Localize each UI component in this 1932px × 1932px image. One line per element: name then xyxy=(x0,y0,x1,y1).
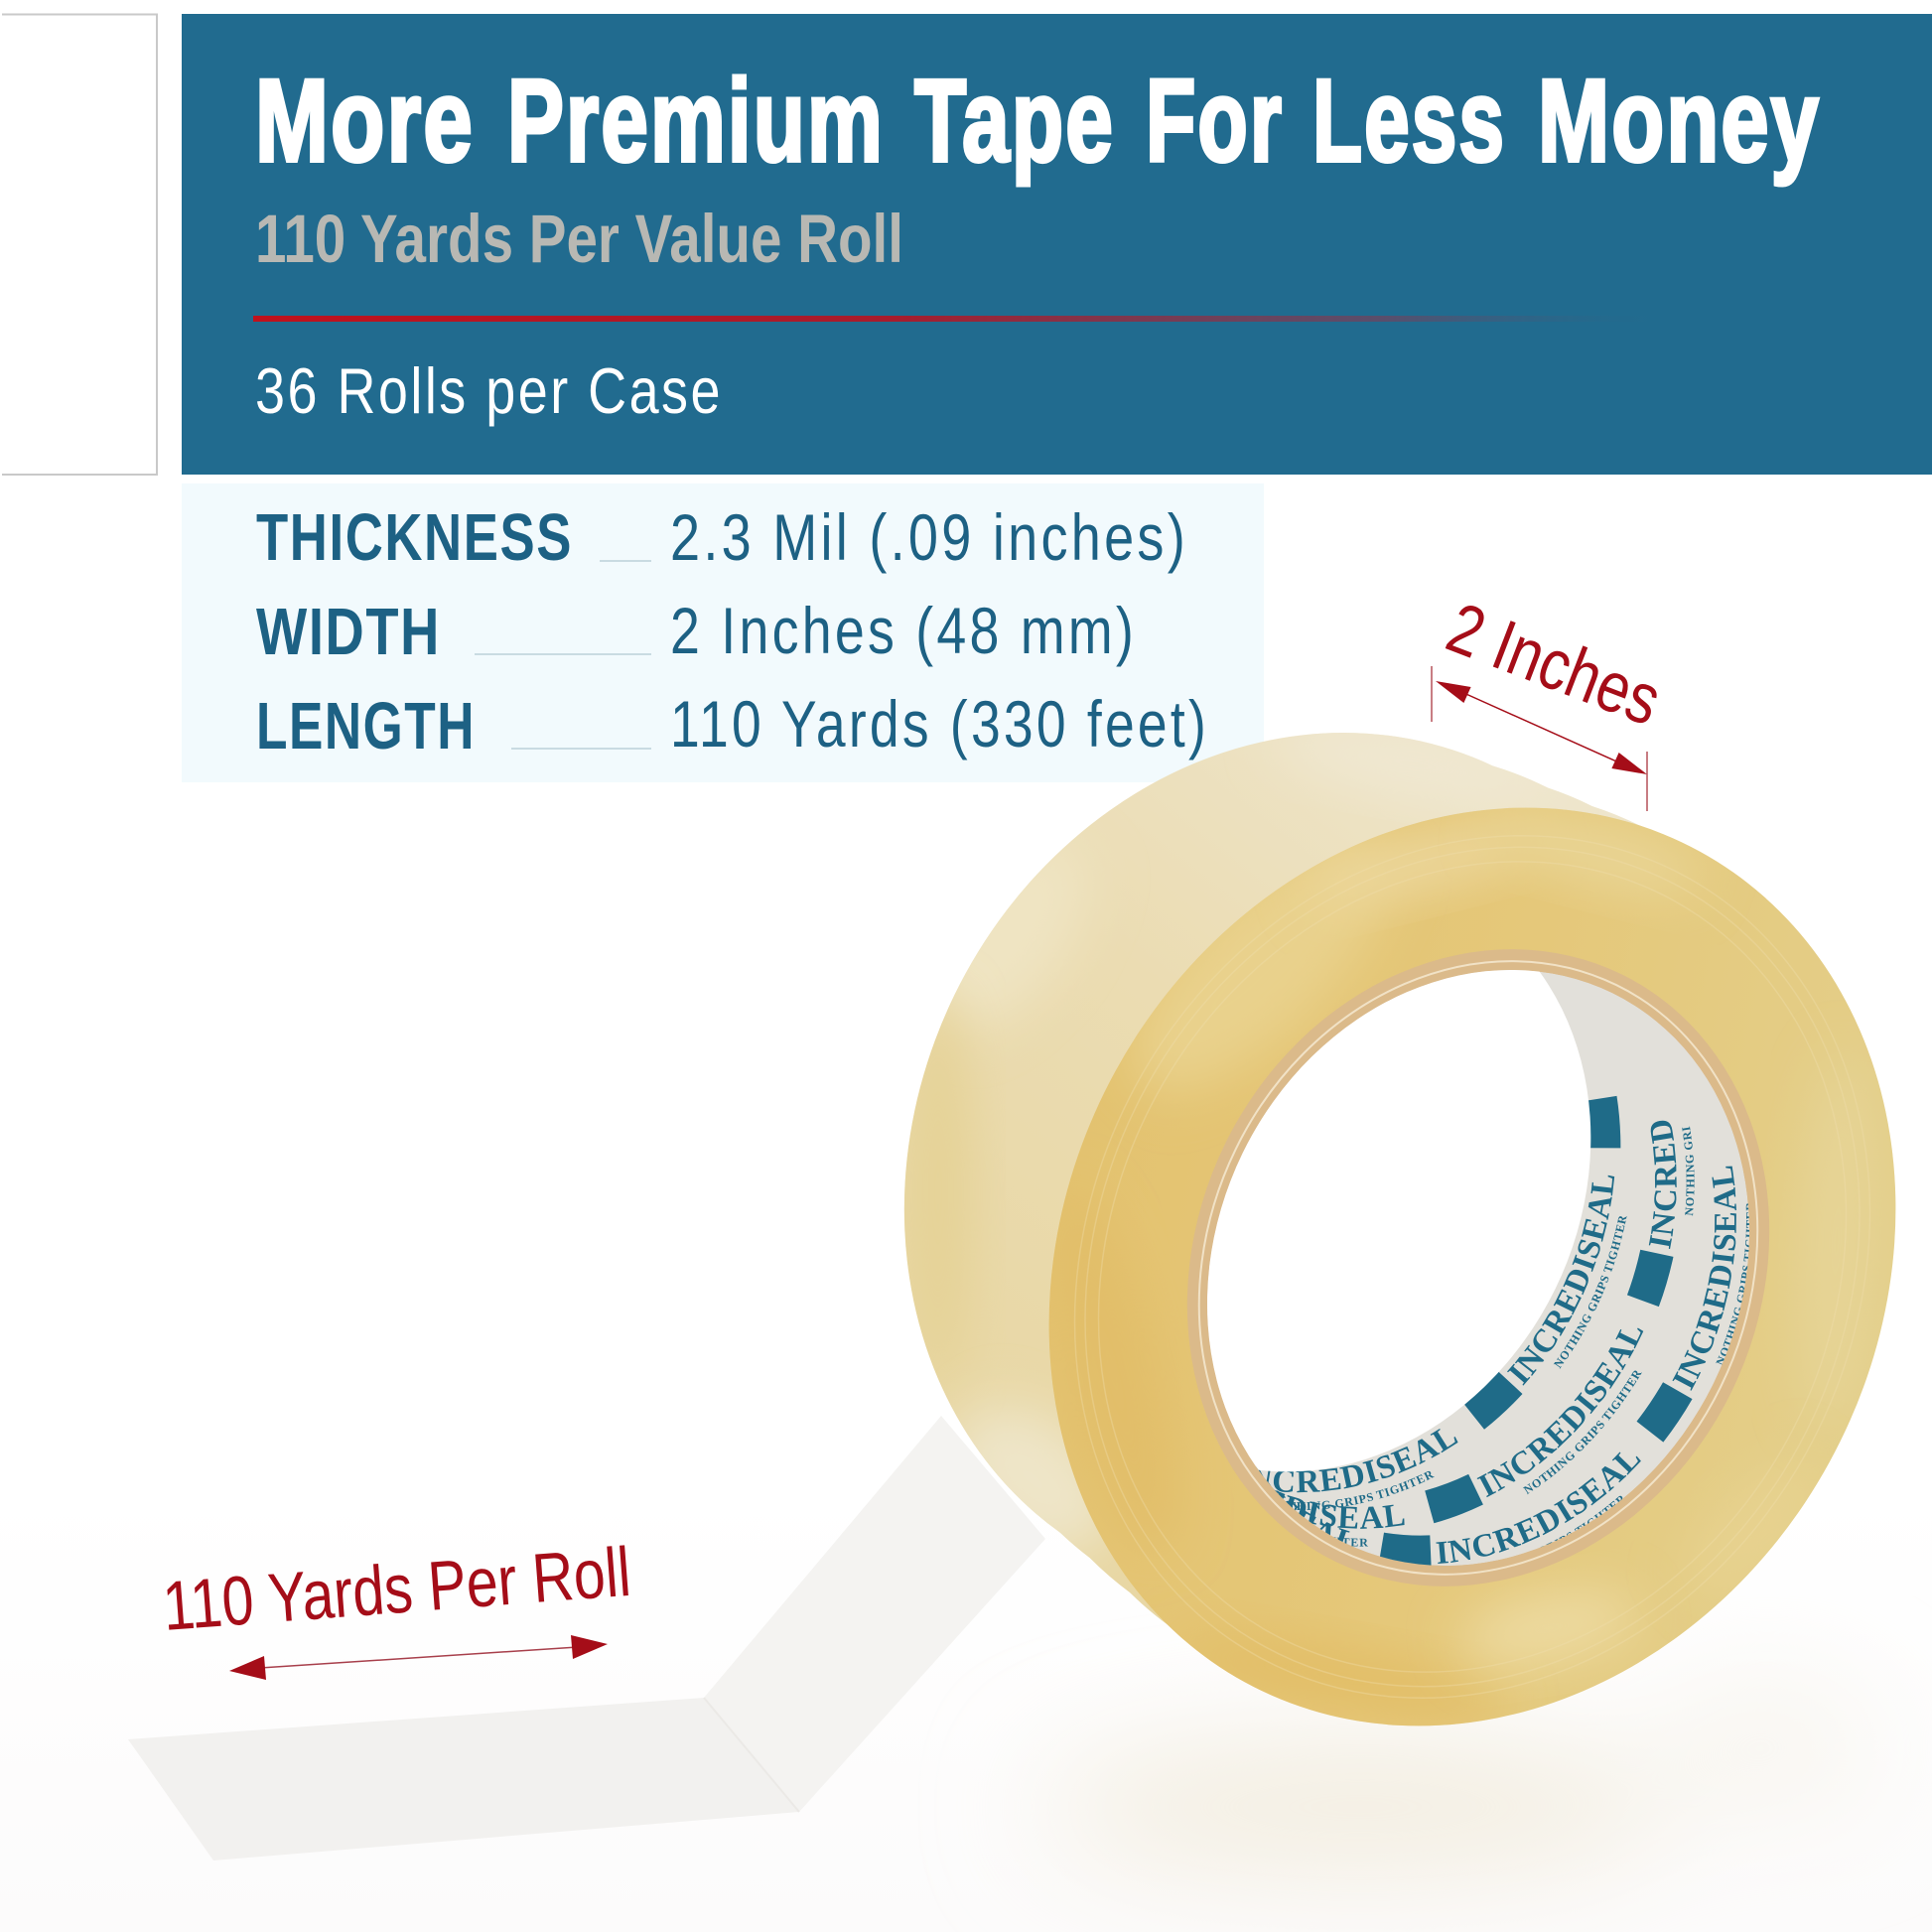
thickness row xyxy=(256,500,1188,575)
tape roll xyxy=(903,733,1896,1725)
floor background xyxy=(0,1489,1932,1932)
brand text bands: INCREDISEAL xyxy=(1436,1451,1641,1564)
floor shadow under roll xyxy=(1042,1688,1876,1871)
brand text bands: NOTHING GRIPS TIGHTER xyxy=(1716,1203,1749,1364)
thickness row: THICKNESS xyxy=(256,500,573,575)
printed core interior xyxy=(1207,970,1749,1566)
subtitle: 110 Yards Per Value Roll xyxy=(255,201,903,277)
width arrow xyxy=(1432,666,1647,811)
tape strip on table xyxy=(128,1416,1045,1861)
kraft core ring xyxy=(1082,851,1874,1685)
red divider xyxy=(253,316,1668,322)
title: Premium xyxy=(507,56,885,187)
brand text bands: NOTHING GRIPS TIGHTER xyxy=(1523,1370,1642,1495)
cardboard core and hole xyxy=(1187,949,1769,1587)
brand text bands: INCREDISEAL xyxy=(1507,1175,1614,1386)
rolls per case: 36 Rolls per Case xyxy=(255,354,723,427)
band patches xyxy=(1380,1096,1692,1566)
title: More xyxy=(255,56,475,187)
brand text bands: INCREDISEAL xyxy=(981,1226,1229,1456)
title: Money xyxy=(1538,56,1821,187)
white opening xyxy=(1207,970,1590,1471)
title: Tape xyxy=(914,56,1115,187)
110 yards label: 110 Yards Per Roll xyxy=(160,1533,633,1645)
thickness row: 2.3 Mil (.09 inches) xyxy=(670,500,1188,574)
specifications panel xyxy=(182,483,1264,782)
width row: WIDTH xyxy=(256,595,441,669)
brand text bands: INCREDISEAL xyxy=(1265,1479,1350,1542)
empty left box xyxy=(2,14,157,475)
brand text bands: NOTHING GRIPS TIGHTER xyxy=(1333,1537,1368,1547)
brand text bands: INCREDISEAL xyxy=(1459,1248,1497,1292)
width row xyxy=(256,594,1137,669)
brand text bands: INCREDISEAL xyxy=(1648,1120,1677,1249)
brand text bands: INCREDISEAL xyxy=(1459,1248,1497,1292)
brand text bands: NOTHING GRIPS TIGHTER xyxy=(1553,1216,1626,1369)
title xyxy=(255,56,1821,187)
roll side body xyxy=(903,733,1640,1625)
brand text bands: NOTHING GRIPS TIGHTER xyxy=(1288,1471,1435,1510)
brand text bands: INCREDISEAL xyxy=(1672,1166,1736,1391)
title: Less xyxy=(1312,56,1506,187)
length dimension callout xyxy=(160,1533,633,1680)
length row xyxy=(256,687,1209,763)
brand text bands xyxy=(1256,1120,1749,1564)
title: For xyxy=(1146,56,1284,187)
brand text bands: INCREDISEAL xyxy=(1275,1489,1405,1529)
length row: 110 Yards (330 feet) xyxy=(670,687,1209,760)
length arrow xyxy=(229,1635,608,1680)
2 inches label: 2 Inches xyxy=(1437,588,1671,741)
brand text bands: NOTHING GRIPS TIGHTER xyxy=(1682,1126,1694,1216)
width row: 2 Inches (48 mm) xyxy=(670,594,1137,667)
brand text bands: INCREDISEAL xyxy=(1256,1429,1457,1493)
length row: LENGTH xyxy=(256,689,476,763)
roll front face xyxy=(1048,808,1896,1725)
brand text bands: INCREDISEAL xyxy=(1477,1328,1644,1497)
width dimension callout xyxy=(1432,588,1671,811)
brand text bands: NOTHING GRIPS TIGHTER xyxy=(1540,1495,1622,1548)
header panel xyxy=(182,14,1932,475)
